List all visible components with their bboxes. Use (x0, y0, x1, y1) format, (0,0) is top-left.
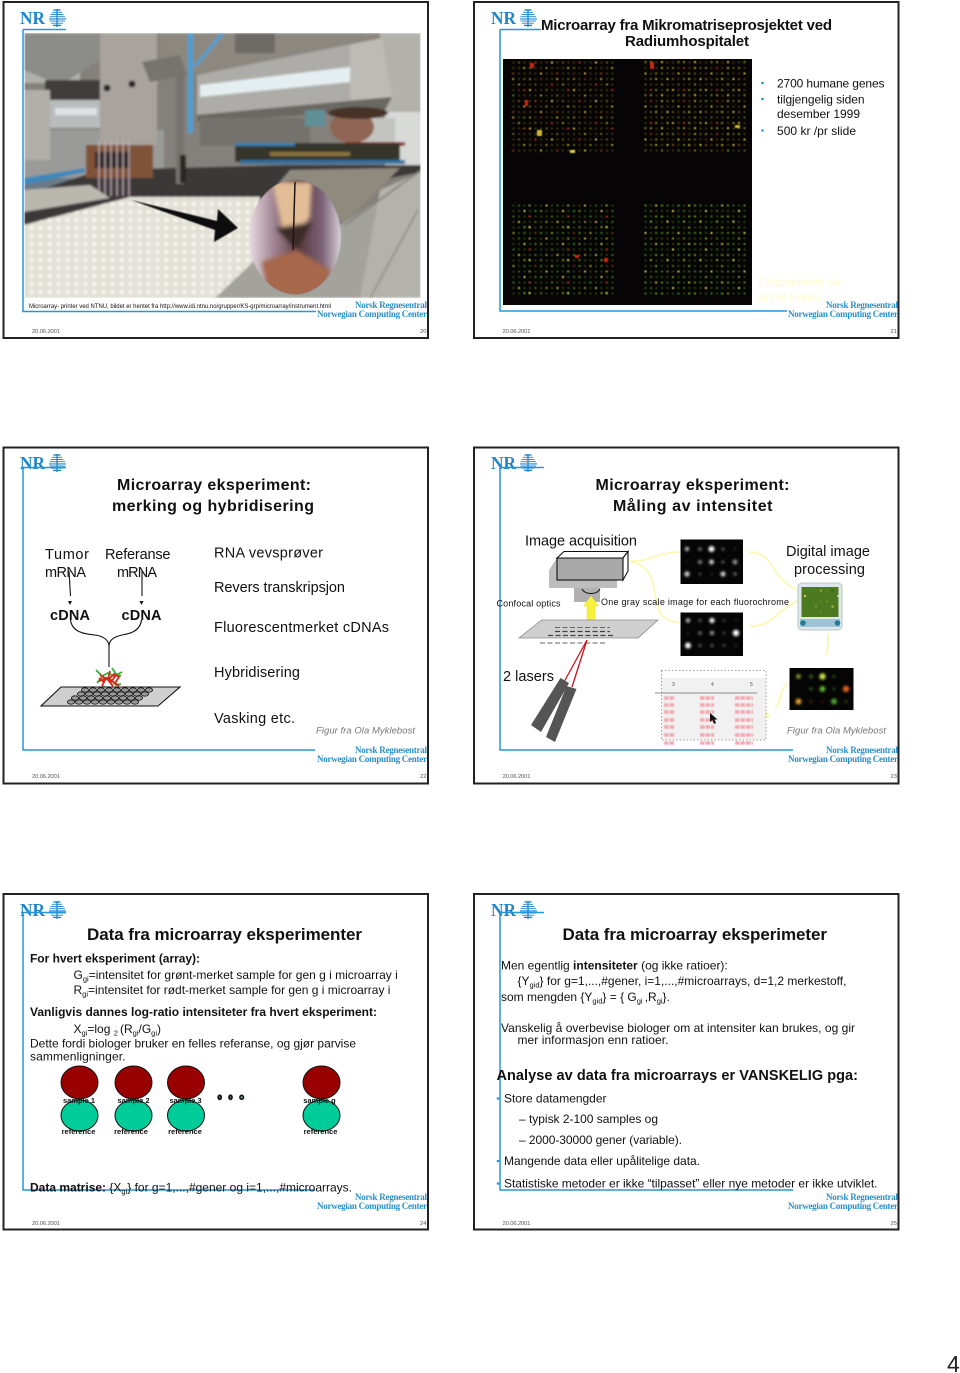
footer: institution name (788, 300, 898, 319)
diagram: sample and reference pairs (61, 1066, 340, 1136)
footer: date and slide number (502, 774, 897, 780)
footer: date and slide number (502, 1221, 897, 1227)
footer: date and slide number: 22 (420, 774, 426, 780)
footer: date and slide number (502, 329, 897, 335)
diagram: cDNA flow: mRNA (45, 565, 86, 581)
footer: date and slide number (32, 1221, 427, 1227)
intensities text: mer informasjon enn ratioer. (518, 1033, 668, 1047)
footer: institution name (788, 1192, 898, 1211)
definitions text: (R (120, 1022, 133, 1036)
labels: 2 lasers (503, 669, 554, 685)
panel: slide 25, data continued (474, 894, 898, 1230)
footer: institution name: Norwegian Computing Center (317, 309, 427, 319)
definitions text (30, 952, 398, 1064)
arrows: mRNA to cDNA (68, 571, 144, 667)
bullet list: – 2000-30000 gener (variable). (519, 1133, 682, 1147)
grayscale image 1 (680, 540, 743, 584)
definitions text: =log (87, 1022, 114, 1036)
slide frame line (500, 467, 793, 750)
panel: slide 24, data from experiments (4, 894, 428, 1230)
logo: NR: NR (491, 8, 517, 28)
title: Radiumhospitalet (625, 33, 749, 50)
intensities text: ,R (645, 990, 657, 1004)
footer: date and slide number: 24 (420, 1221, 427, 1227)
slide frame line (23, 30, 316, 312)
scanner camera (549, 552, 628, 602)
data table: 3 (672, 682, 675, 688)
icon: mouse cursor (710, 713, 718, 724)
logo: NR (491, 8, 537, 28)
diagram: sample and reference pairs: sample 3 (169, 1096, 202, 1105)
steps list: Fluorescentmerket cDNAs (214, 620, 389, 636)
panel: slide 22, labelling and hybridisation (4, 448, 428, 784)
microarray scan image (503, 59, 752, 305)
steps list (214, 546, 389, 727)
title (541, 17, 832, 50)
definitions text: gi (151, 1028, 157, 1038)
pale yellow connectors (630, 552, 828, 718)
footer: institution name: Norsk Regnesentral (826, 745, 898, 755)
slide frame line (500, 30, 787, 311)
credit, pale (757, 275, 842, 304)
footer: date and slide number: 25 (890, 1221, 897, 1227)
footer: institution name: Norsk Regnesentral (355, 300, 427, 310)
footer: institution name (788, 745, 898, 764)
grayscale image 2 (680, 612, 743, 656)
credit, pale: Eksperiment av (758, 275, 842, 289)
footer: date and slide number: 20.06.2001 (502, 774, 530, 780)
diagram: sample and reference pairs: reference (114, 1127, 148, 1136)
title (112, 477, 314, 515)
panel: slide 20, microarray printer photo (4, 2, 428, 338)
diagram: sample and reference pairs: sample 1 (63, 1096, 95, 1105)
hybridised strands (96, 668, 122, 689)
steps list: Vasking etc. (214, 711, 295, 727)
logo: NR: NR (20, 453, 46, 473)
intensities text: } for g=1,...,#gener, i=1,...,#microarrays, d=1,2 merkestoff, (540, 974, 846, 988)
bullet list: tilgjengelig siden (777, 92, 864, 106)
definitions text: R (74, 983, 82, 997)
footer: date and slide number (32, 329, 426, 335)
diagram: cDNA flow: cDNA (50, 608, 91, 624)
steps list: RNA vevsprøver (214, 546, 323, 562)
intensities text: som mengden {Y (501, 990, 592, 1004)
array slide with spots (41, 687, 180, 706)
footer: institution name: Norsk Regnesentral (355, 745, 427, 755)
slide frame line (23, 467, 315, 750)
colour composite image (790, 668, 854, 710)
footer: date and slide number: 21 (890, 329, 897, 335)
yellow light arrow (578, 596, 604, 632)
title: Data fra microarray eksperimeter (562, 925, 827, 944)
panel: slide 21, microarray image (474, 2, 898, 338)
diagram: sample and reference pairs: reference (62, 1127, 95, 1136)
title (596, 477, 790, 515)
intensities text: } = { G (602, 990, 637, 1004)
glass slide (519, 620, 658, 643)
footer: date and slide number: 20.06.2001 (32, 774, 60, 780)
footer: institution name (317, 745, 427, 764)
data table (655, 670, 766, 743)
title: Microarray eksperiment: (596, 477, 790, 494)
figure credit: Figur fra Ola Myklebost (316, 726, 415, 736)
footer: institution name: Norwegian Computing Center (788, 1201, 898, 1211)
data matrix text: } for g=1,...,#gener og i=1,...,#microarrays. (127, 1180, 352, 1194)
logo: NR: NR (20, 8, 46, 28)
steps list: Revers transkripsjon (214, 580, 345, 596)
labels: Digital image (786, 544, 870, 560)
bullet list (497, 1092, 878, 1190)
footer: date and slide number: 20.06.2001 (502, 1221, 530, 1227)
definitions text: /G (138, 1022, 151, 1036)
definitions text: =intensitet for grønt-merket sample for gen g i microarray i (89, 968, 398, 982)
intensities text: Men egentlig intensiteter (og ikke ratioer): (501, 958, 728, 972)
footer: date and slide number: 20.06.2001 (32, 1221, 60, 1227)
definitions text: =intensitet for rødt-merket sample for gen g i microarray i (88, 983, 390, 997)
data table: 4 (711, 682, 714, 688)
photo: microarray printer with zoomed pin (24, 33, 421, 300)
definitions text: G (74, 968, 83, 982)
footer: date and slide number: 20 (420, 329, 426, 335)
diagram: cDNA flow: Referanse (105, 547, 170, 563)
footer: institution name: Norsk Regnesentral (826, 1192, 898, 1202)
bullet list: 2700 humane genes (777, 76, 884, 90)
footer: date and slide number: 20.06.2001 (502, 329, 530, 335)
slide frame line (23, 913, 315, 1190)
definitions text: X (74, 1022, 82, 1036)
diagram: cDNA flow: Tumor (45, 547, 89, 563)
labels (496, 534, 870, 685)
intensities text: }. (663, 990, 670, 1004)
definitions text: Vanligvis dannes log-ratio intensiteter fra hvert eksperiment: (30, 1005, 377, 1019)
title: Microarray eksperiment: (117, 477, 311, 494)
footer: institution name: Norwegian Computing Center (788, 754, 898, 764)
title: Måling av intensitet (613, 497, 773, 515)
definitions text: ) (157, 1022, 161, 1036)
bullet list: Store datamengder (504, 1092, 606, 1106)
definitions text: Dette fordi biologer bruker en felles referanse, og gjør parvise (30, 1036, 356, 1050)
definitions text: gi (133, 1028, 139, 1038)
intensities text: gid (592, 996, 602, 1006)
steps list: Hybridisering (214, 665, 300, 681)
footer: institution name: Norsk Regnesentral (826, 300, 898, 310)
panel: slide 23, intensity measurement (474, 448, 898, 784)
bullet list: 500 kr /pr slide (777, 124, 856, 138)
diagram: sample and reference pairs: reference (304, 1127, 337, 1136)
bullet list: Statistiske metoder er ikke “tilpasset” eller nye metoder er ikke utviklet. (504, 1176, 878, 1190)
icon: black arrow (131, 200, 238, 242)
credit, pale: Anne Forus (757, 290, 820, 304)
footer: date and slide number (32, 774, 426, 780)
bullet list: Mangende data eller upålitelige data. (504, 1154, 700, 1168)
definitions text: gi (83, 974, 89, 984)
labels: Image acquisition (525, 534, 637, 550)
logo: NR (20, 900, 66, 920)
footer: institution name: Norwegian Computing Center (788, 309, 898, 319)
intensities text: gid (530, 980, 540, 990)
analysis heading: Analyse av data fra microarrays er VANSKELIG pga: (496, 1068, 858, 1084)
intensities text (501, 958, 855, 1047)
icon: monitor (798, 583, 842, 630)
figure credit: Figur fra Ola Myklebost (787, 726, 886, 736)
diagram: sample and reference pairs: sample 2 (117, 1096, 150, 1105)
definitions text: For hvert eksperiment (array): (30, 952, 200, 966)
footer: institution name: Norwegian Computing Center (317, 754, 427, 764)
intensities text: gi (637, 996, 645, 1006)
title: Data fra microarray eksperimenter (87, 925, 362, 944)
caption: Microarray- printer ved NTNU, bildet er hentet fra http://www.idi.ntnu.no/grupper/KS-grp/microarray/instrument.html (29, 304, 331, 310)
labels: One gray scale image for each fluorochrome (601, 597, 789, 607)
logo: NR (491, 900, 544, 920)
logo: NR (20, 8, 66, 28)
labels: Confocal optics (496, 598, 561, 608)
definitions text: gi (82, 990, 88, 998)
footer: date and slide number: 23 (890, 774, 897, 780)
data table: 5 (750, 682, 753, 688)
definitions text: sammenligninger. (30, 1050, 126, 1064)
intensities text: Vanskelig å overbevise biologer om at intensiter kan brukes, og gir (501, 1021, 855, 1035)
intensities text: gi (657, 996, 663, 1006)
logo: NR: NR (491, 900, 517, 920)
title: merking og hybridisering (112, 498, 314, 515)
footer: date and slide number: 20.06.2001 (32, 329, 60, 335)
slide frame line (500, 913, 793, 1190)
data matrix text: gi (121, 1187, 128, 1196)
footer: institution name: Norwegian Computing Center (317, 1201, 427, 1211)
diagram: cDNA flow: mRNA (117, 565, 157, 581)
bullet list: – typisk 2-100 samples og (519, 1112, 658, 1126)
bullet list (761, 76, 884, 138)
intensities text: {Y (518, 974, 530, 988)
bullet list: desember 1999 (777, 107, 860, 121)
footer: institution name (317, 1192, 427, 1211)
data matrix text: Data matrise: {X (30, 1180, 121, 1194)
logo: NR: NR (491, 453, 517, 473)
title: Microarray fra Mikromatriseprosjektet ved (541, 17, 832, 34)
logo: NR (20, 453, 66, 473)
logo: NR: NR (20, 900, 46, 920)
definitions text: gi (82, 1028, 88, 1038)
diagram: cDNA flow (41, 547, 180, 706)
definitions text: 2 (114, 1028, 120, 1038)
diagram: cDNA flow: cDNA (122, 608, 162, 624)
diagram: sample and reference pairs: reference (168, 1127, 202, 1136)
ellipsis dots (218, 1095, 244, 1100)
footer: institution name: Norsk Regnesentral (355, 1192, 427, 1202)
inset oval: zoomed pin (249, 180, 341, 300)
diagram: sample and reference pairs: sample g (303, 1096, 336, 1105)
lasers (531, 640, 587, 742)
labels: processing (794, 562, 865, 578)
logo: NR (491, 453, 544, 473)
footer: institution name (317, 300, 427, 319)
